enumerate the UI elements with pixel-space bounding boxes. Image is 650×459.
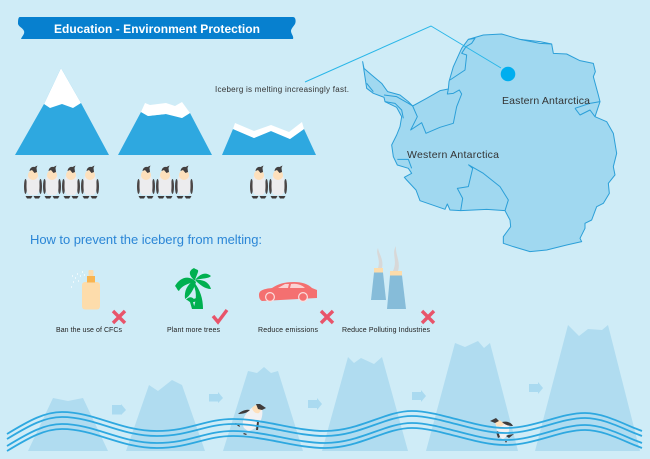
waves: [7, 411, 642, 451]
iceberg small: [222, 122, 316, 155]
penguins: two: [250, 166, 287, 198]
title banner: Education - Environment Protection: [54, 22, 260, 36]
label: Eastern Antarctica: Eastern Antarctica: [502, 95, 590, 107]
caption: trees: Plant more trees: [167, 327, 220, 334]
iceberg large: [15, 68, 109, 155]
caption: emissions: Reduce emissions: [258, 327, 318, 334]
icon: palm tree: [175, 268, 211, 309]
icon: spray bottle: [71, 270, 100, 310]
callout text: Iceberg is melting increasingly fast.: [215, 85, 349, 94]
caption: polluting industries: Reduce Polluting Industries: [342, 327, 430, 334]
map marker dot: [501, 67, 515, 81]
swimming penguin right: [490, 418, 514, 443]
mark: cross: [422, 311, 434, 323]
mark: cross: [113, 311, 125, 323]
penguins: three: [137, 166, 193, 198]
icon: car: [259, 282, 317, 301]
prevention heading: How to prevent the iceberg from melting:: [30, 232, 262, 247]
iceberg medium: [118, 102, 212, 155]
icon: factory chimneys: [371, 246, 406, 309]
mark: cross: [321, 311, 333, 323]
title banner: [18, 17, 296, 39]
progress arrows: [112, 382, 543, 415]
melting icebergs row: [28, 325, 640, 451]
swimming penguin left: [235, 404, 266, 435]
caption: CFCs: Ban the use of CFCs: [56, 327, 122, 334]
map of Antarctica: [363, 34, 617, 252]
mark: check: [213, 310, 227, 322]
penguins: four: [24, 166, 99, 198]
label: Western Antarctica: Western Antarctica: [407, 149, 499, 161]
callout leader line: [305, 26, 501, 82]
